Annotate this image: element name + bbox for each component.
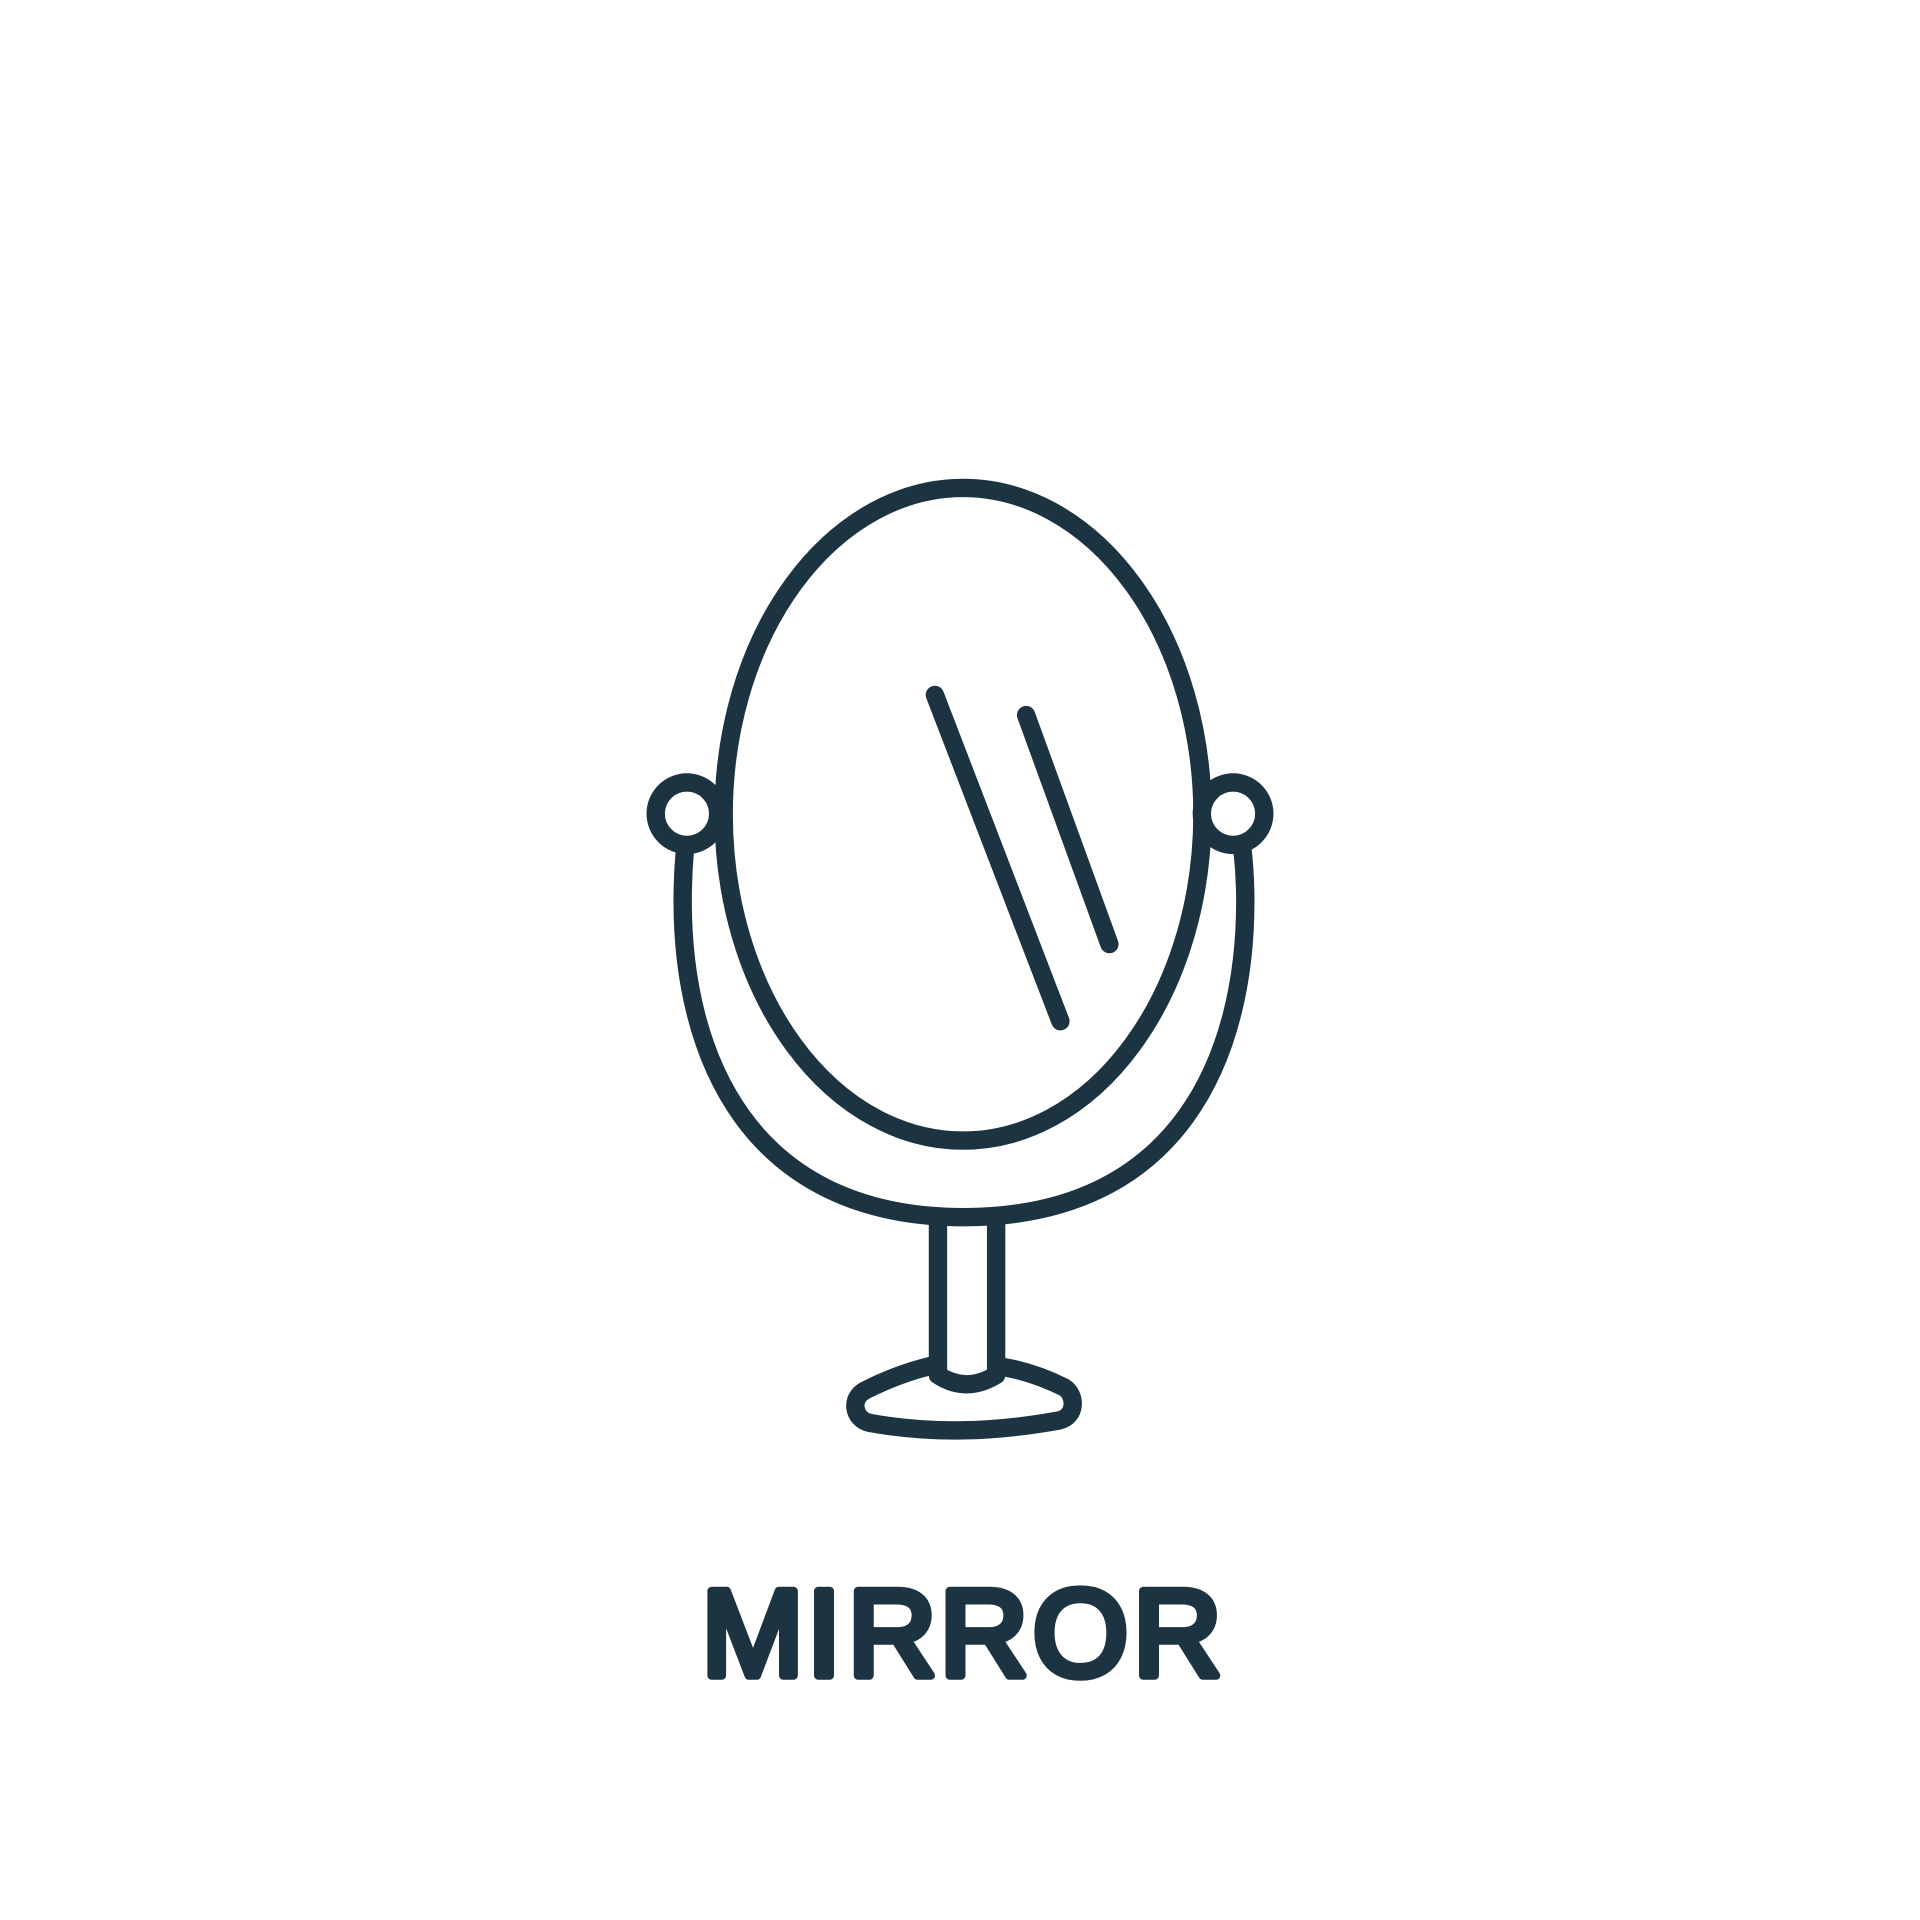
stand stem <box>938 1224 996 1384</box>
stand base <box>855 1366 1073 1430</box>
right pivot knob <box>1202 782 1264 845</box>
mirror oval <box>724 488 1202 1141</box>
reflection line long <box>935 695 1060 1021</box>
icon: table mirror <box>656 488 1264 1430</box>
left pivot knob <box>656 782 718 845</box>
title: MIRROR <box>702 1565 1222 1702</box>
reflection line short <box>1026 715 1109 944</box>
cradle arm <box>683 847 1245 1217</box>
